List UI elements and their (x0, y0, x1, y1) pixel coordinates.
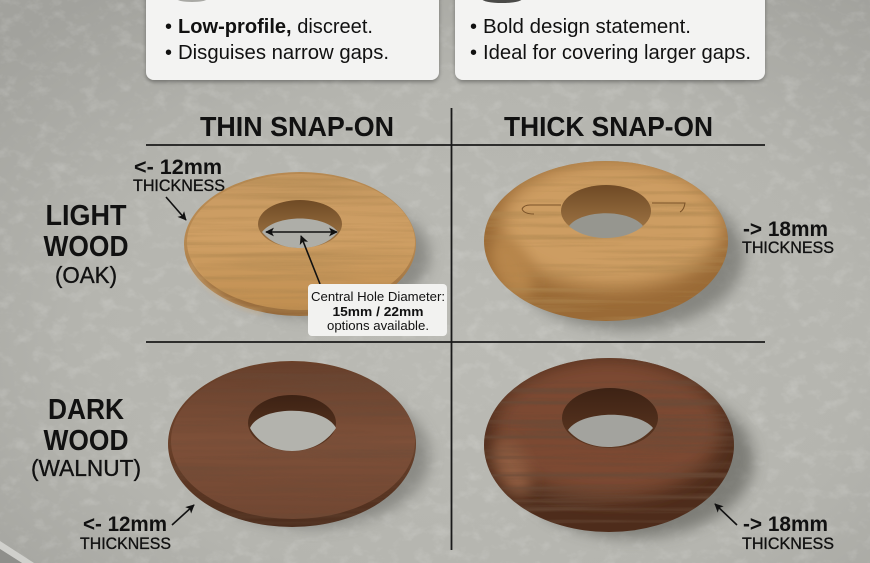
label: thin oak 12mm thickness (133, 156, 225, 195)
disc: thick oak (480, 158, 744, 330)
label: thick oak 18mm thickness: THICKNESS (742, 238, 834, 257)
row label: light wood: LIGHT (46, 200, 127, 232)
heading: thin snap-on: THIN SNAP-ON (200, 111, 394, 142)
arrow: thin oak thickness (166, 197, 186, 220)
label: thin oak 12mm thickness: <- 12mm (134, 156, 222, 179)
row label: light wood: WOOD (44, 231, 128, 263)
label: thick walnut 18mm thickness (742, 513, 834, 553)
row label: dark wood: (WALNUT) (31, 455, 141, 481)
row label: light wood: (OAK) (55, 262, 117, 288)
text: thick benefits: Ideal for covering larger gaps. (483, 42, 751, 64)
label: thick walnut 18mm thickness: -> 18mm (743, 513, 828, 536)
grid lines (146, 108, 765, 550)
callout: central hole diameter: 15mm / 22mm (332, 304, 424, 319)
text: thick benefits (470, 16, 751, 64)
text: thick benefits: • (470, 16, 477, 38)
callout: central hole diameter: Central Hole Diameter: (311, 289, 445, 304)
label: thick walnut 18mm thickness: THICKNESS (742, 534, 834, 553)
label: thin walnut 12mm thickness (80, 513, 171, 553)
text: thick benefits: • (470, 42, 477, 64)
label: thick oak 18mm thickness: -> 18mm (743, 218, 828, 241)
arrow: thick walnut thickness (715, 504, 737, 525)
label: thin walnut 12mm thickness: THICKNESS (80, 534, 171, 553)
label: thin walnut 12mm thickness: <- 12mm (83, 513, 167, 536)
row label: dark wood: DARK (48, 394, 124, 426)
callout: central hole diameter: options available. (327, 318, 429, 333)
text: thin benefits: • (165, 42, 172, 64)
row label: light wood (44, 200, 128, 288)
label: thick oak 18mm thickness (742, 218, 834, 257)
panel: thick snap-on benefits card (455, 0, 765, 80)
icon: thick profile remnant (482, 0, 522, 3)
text: thin benefits: • (165, 16, 172, 38)
dimension arrow: central hole width (266, 231, 337, 233)
text: thick benefits: Bold design statement. (483, 16, 691, 38)
heading: thick snap-on: THICK SNAP-ON (504, 111, 713, 142)
row label: dark wood: WOOD (44, 425, 128, 457)
disc: thick walnut (480, 355, 754, 538)
row label: dark wood (31, 394, 141, 481)
icon: thin profile remnant (177, 0, 207, 2)
arrow: callout to hole (301, 236, 320, 284)
text: thin benefits: Disguises narrow gaps. (178, 42, 389, 64)
text: thin benefits: Low-profile, discreet. (178, 16, 373, 38)
arrow: thin walnut thickness (172, 505, 194, 525)
panel: thin snap-on benefits card (146, 0, 439, 80)
disc: thin oak (180, 170, 430, 320)
text: thin benefits (165, 16, 389, 64)
label: thin oak 12mm thickness: THICKNESS (133, 176, 225, 195)
callout: central hole diameter (308, 284, 447, 336)
disc: thin walnut (165, 358, 430, 530)
